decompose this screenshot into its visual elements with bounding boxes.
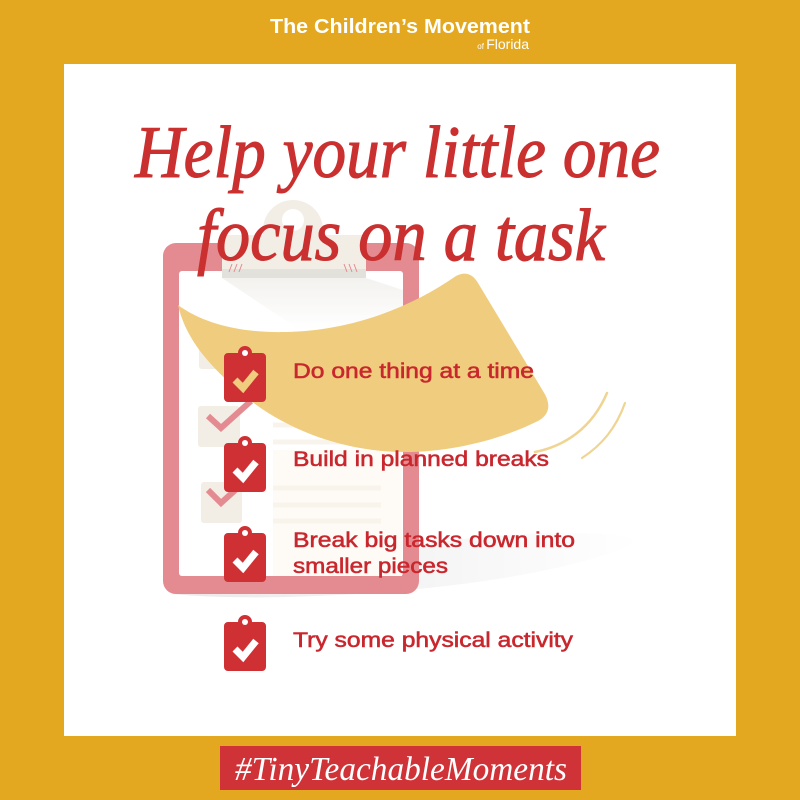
illustration: clipboard with curling page: [163, 200, 640, 597]
clipboard board: [163, 243, 419, 594]
checklist item: break big tasks: smaller pieces: [293, 555, 448, 578]
checklist item: planned breaks: Build in planned breaks: [293, 448, 549, 471]
hashtag banner: #TinyTeachableMoments: [235, 751, 567, 788]
checklist item: break big tasks: [224, 526, 575, 582]
checklist item: physical activity: [224, 615, 574, 671]
motion line 1: [535, 393, 607, 452]
title: [134, 112, 660, 277]
panel: white content card: [64, 64, 736, 736]
curled page: [178, 274, 548, 452]
task check 3: [208, 483, 243, 503]
checklist item: break big tasks: Break big tasks down into: [293, 529, 575, 552]
title: focus on a task: [197, 195, 606, 277]
title: Help your little one: [134, 112, 660, 194]
task row 3: [201, 482, 242, 523]
motion line 2: [582, 403, 625, 458]
logo: The Children's Movement of Florida: [270, 16, 530, 52]
task row 1: [199, 345, 240, 369]
checklist item: do one thing: [224, 346, 534, 402]
logo: The Children's Movement of Florida: of Florida: [477, 36, 529, 52]
clip band: [222, 269, 366, 278]
paper tint: [273, 450, 402, 576]
checklist item: do one thing: Do one thing at a time: [293, 360, 534, 383]
clip body: [222, 235, 366, 278]
clip marks: [229, 264, 357, 272]
logo: The Children's Movement of Florida: The Children’s Movement: [270, 16, 530, 38]
task row 2: [198, 406, 240, 447]
icon: clipboard check: [224, 436, 266, 492]
icon: clipboard check: [224, 526, 266, 582]
clip shadow on sheet: [222, 278, 403, 330]
task lines: [273, 425, 382, 521]
clip ring: [263, 200, 323, 236]
icon: clipboard check: [224, 346, 266, 402]
checklist item: physical activity: Try some physical activity: [293, 629, 574, 652]
task check 2: [208, 401, 251, 428]
paper sheet: [179, 271, 403, 576]
icon: clipboard check: [224, 615, 266, 671]
checklist item: planned breaks: [224, 436, 549, 492]
floor shadow: [172, 533, 640, 597]
